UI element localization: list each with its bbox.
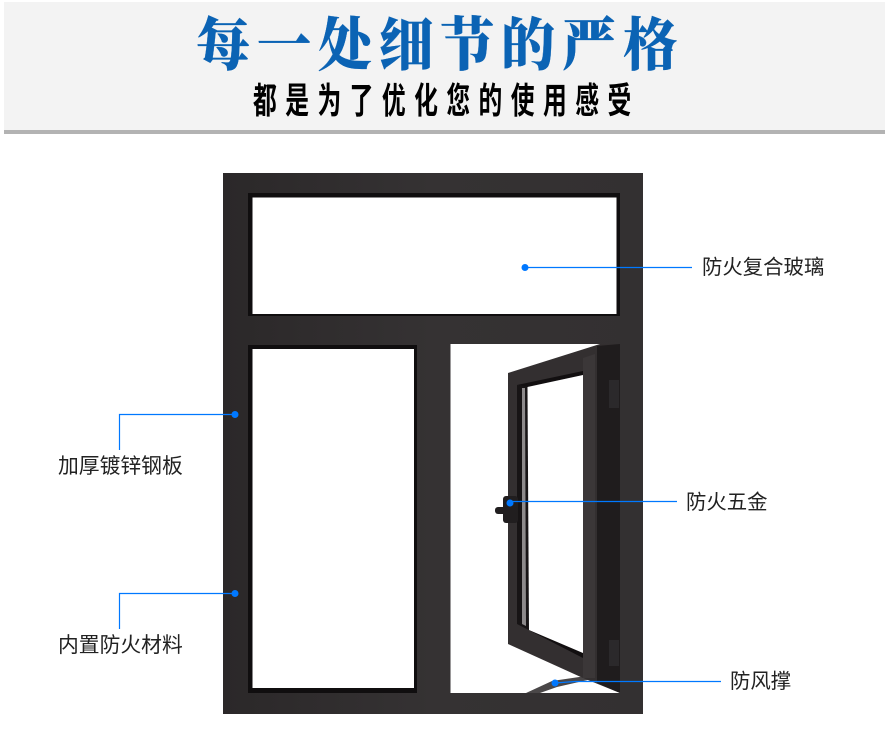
callout: fire-rated hardware [506, 491, 768, 514]
door handle [495, 496, 518, 523]
callout: built-in fireproof material [58, 590, 238, 657]
window frame [223, 173, 643, 714]
hinge bottom [609, 640, 619, 666]
callout: thick galvanized steel [58, 411, 238, 478]
callout: fire-rated hardware: 防火五金 [686, 491, 768, 514]
wind brace [526, 676, 592, 693]
callout: fire-rated composite glass: 防火复合玻璃 [702, 256, 824, 279]
callout: thick galvanized steel: 加厚镀锌钢板 [58, 455, 183, 478]
callout: fire-rated composite glass [522, 256, 824, 279]
callout: built-in fireproof material: 内置防火材料 [58, 634, 183, 657]
callout: wind brace: 防风撑 [730, 670, 791, 693]
top fixed glass pane [248, 193, 620, 316]
lower left glass pane [248, 345, 417, 693]
callout: wind brace [552, 670, 791, 693]
subtitle: 都是为了优化您的使用感受 [253, 72, 631, 124]
title: 每一处细节的严格 [196, 0, 677, 81]
open casement sash [495, 344, 620, 693]
lower right opening [450, 344, 620, 693]
header banner [4, 0, 885, 134]
hinge top [609, 380, 619, 408]
